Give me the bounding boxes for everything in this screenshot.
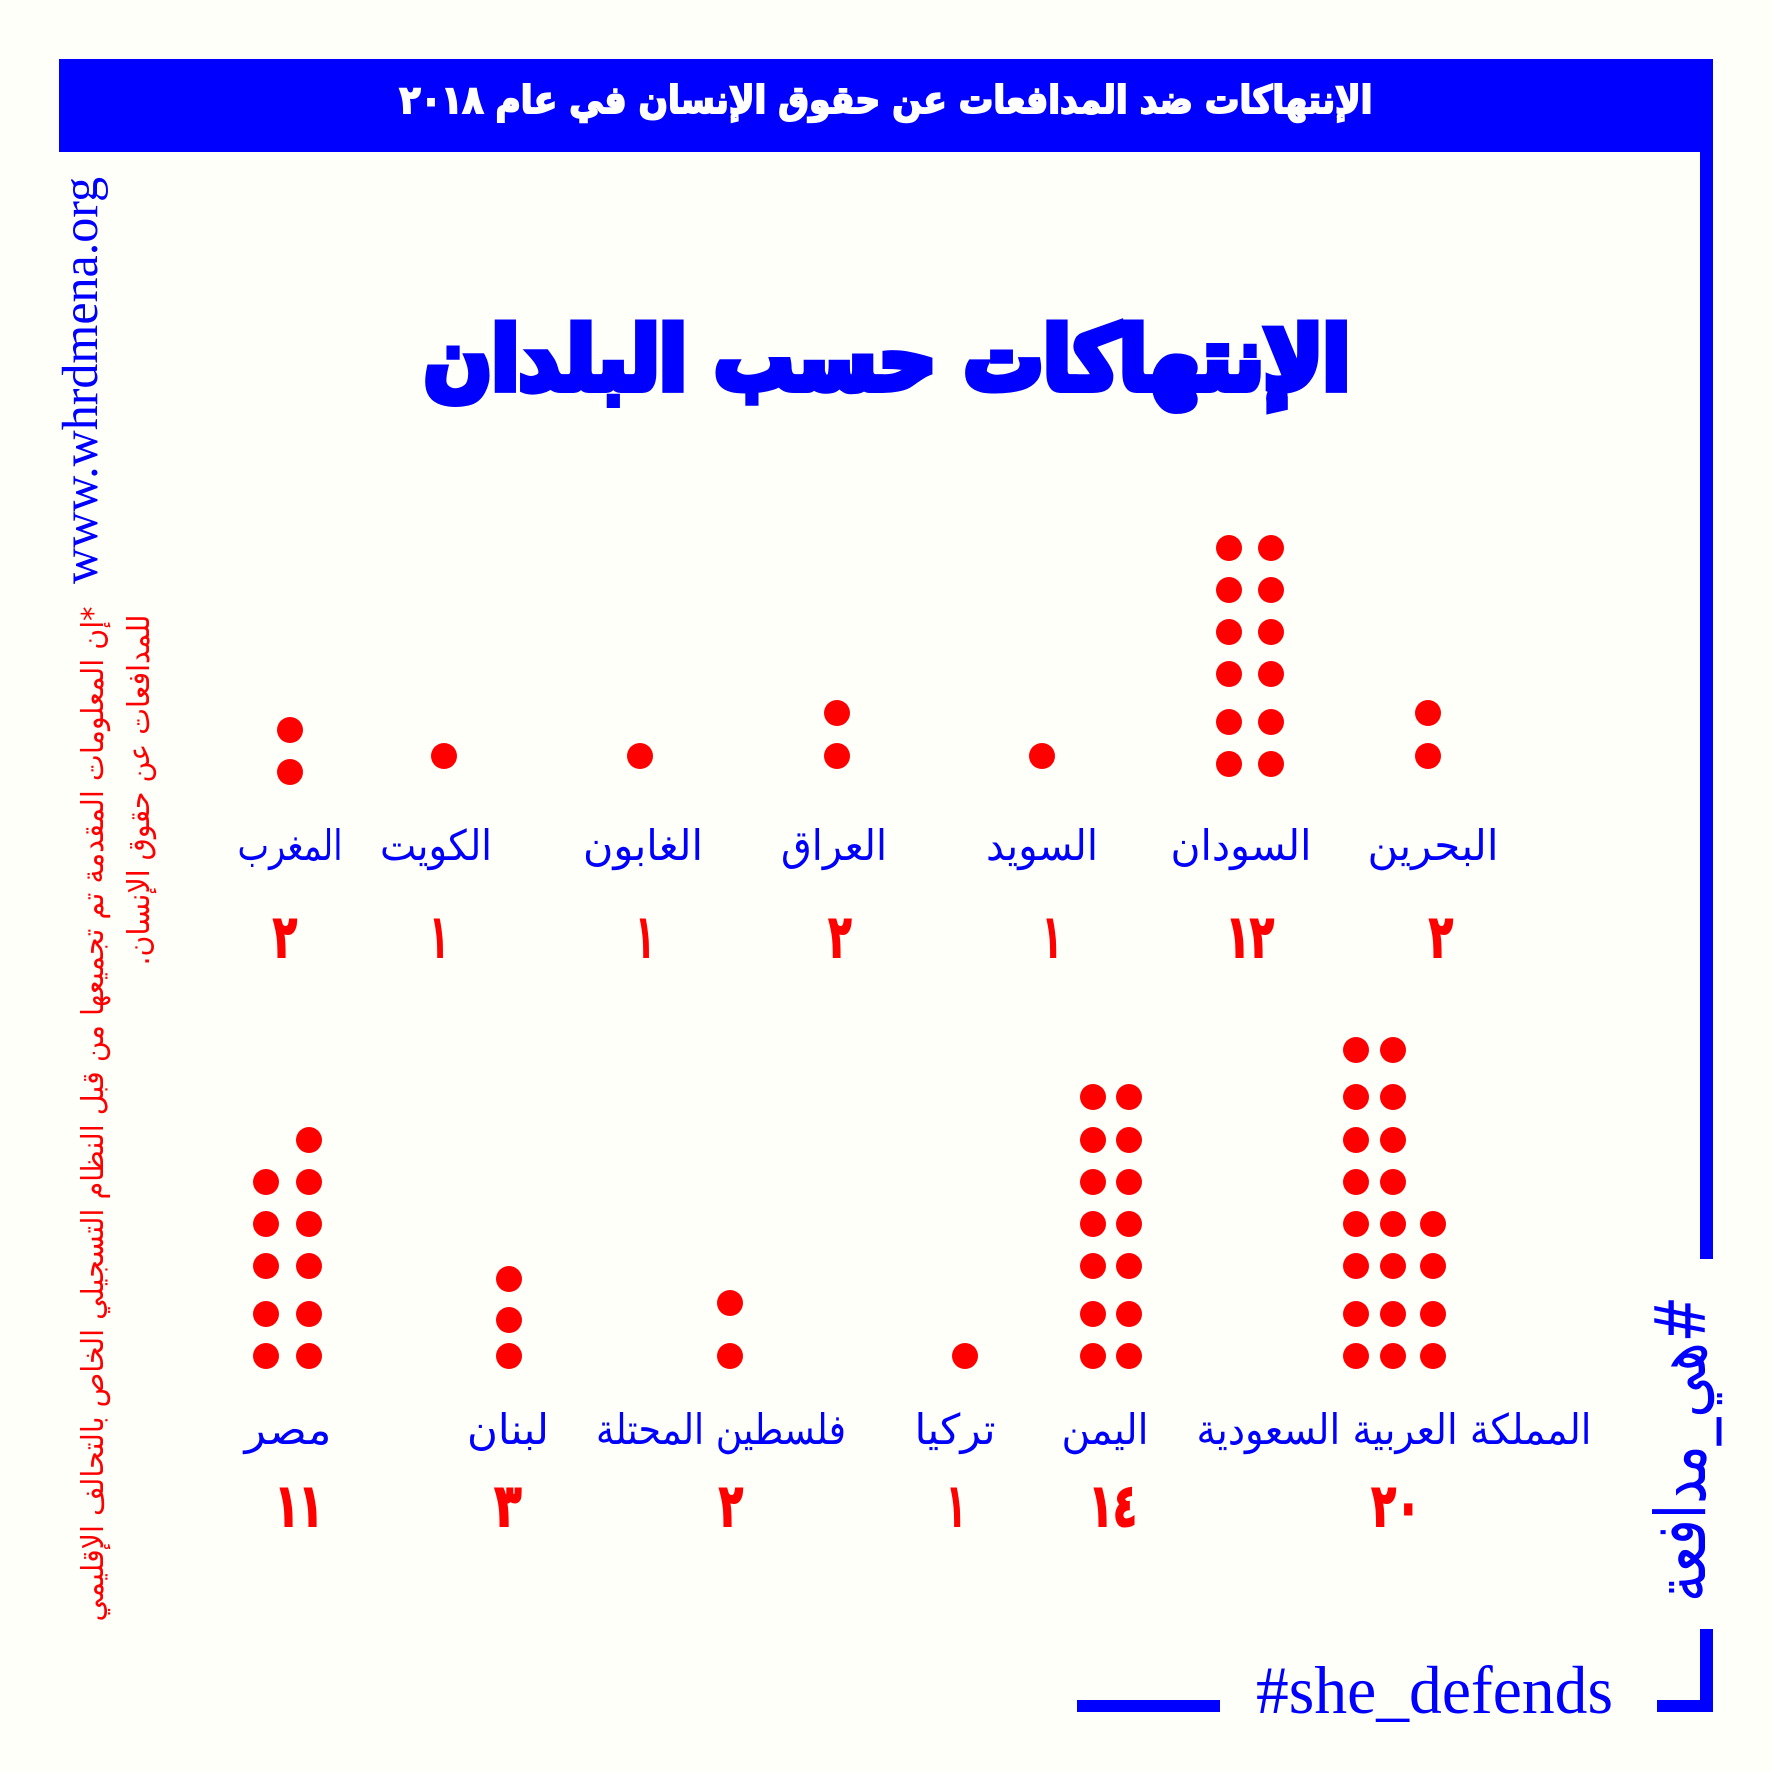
footnote: للمدافعات عن حقوق الإنسان. <box>122 614 157 966</box>
country: Turkey <box>914 1343 996 1540</box>
country: Iraq: ٢ <box>828 902 852 971</box>
country: Saudi Arabia <box>1196 1037 1592 1540</box>
header title: الإنتهاكات ضد المدافعات عن حقوق الإنسان في عام ٢٠١٨ <box>400 78 1372 123</box>
country: Yemen: ١٤ <box>1089 1471 1137 1540</box>
country: Sweden <box>986 743 1098 971</box>
country: Lebanon: ٣ <box>494 1471 522 1540</box>
country: Kuwait <box>380 743 492 971</box>
arabic hashtag: #هي_مدافعة <box>1640 1296 1723 1602</box>
country: Egypt: ١١ <box>275 1471 323 1540</box>
country: Iraq <box>781 700 887 971</box>
country: Sweden: ١ <box>1043 902 1061 971</box>
country: Turkey: ١ <box>947 1471 965 1540</box>
main title: الإنتهاكات حسب البلدان <box>424 310 1350 411</box>
footnote: *إن المعلومات المقدمة تم تجميعها من قبل النظام التسجيلي الخاص بالتحالف الإقليمي <box>76 606 111 1622</box>
country: Gabon: الغابون <box>583 821 703 870</box>
country: Egypt <box>242 1127 332 1540</box>
country: Saudi Arabia: ٢٠ <box>1372 1471 1420 1540</box>
country: Lebanon: لبنان <box>467 1405 549 1454</box>
country: Morocco <box>238 717 342 971</box>
country: Lebanon <box>467 1266 549 1540</box>
country: Occupied Palestine: فلسطين المحتلة <box>596 1405 846 1454</box>
country: Gabon <box>583 743 703 971</box>
website url: www.whrdmena.org <box>53 177 109 584</box>
country: Sudan <box>1170 535 1312 971</box>
country: Turkey: تركيا <box>914 1405 996 1454</box>
country: Sudan: ١٢ <box>1226 902 1274 971</box>
country: Morocco: ٢ <box>273 902 297 971</box>
english hashtag: #she_defends <box>1256 1652 1613 1728</box>
country: Sudan: السودان <box>1170 821 1312 870</box>
country: Saudi Arabia: المملكة العربية السعودية <box>1196 1405 1592 1454</box>
country: Kuwait: ١ <box>430 902 448 971</box>
country: Gabon: ١ <box>636 902 654 971</box>
frame line bottom <box>1077 1700 1220 1712</box>
country: Yemen <box>1062 1084 1148 1540</box>
country: Bahrain: البحرين <box>1368 821 1498 870</box>
header bar <box>59 59 1713 152</box>
country: Yemen: اليمن <box>1062 1405 1148 1454</box>
country: Kuwait: الكويت <box>380 821 492 870</box>
country: Bahrain <box>1368 700 1498 971</box>
country: Morocco: المغرب <box>238 821 342 870</box>
country: Occupied Palestine <box>596 1290 846 1540</box>
country: Occupied Palestine: ٢ <box>719 1471 743 1540</box>
country: Bahrain: ٢ <box>1429 902 1453 971</box>
country: Egypt: مصر <box>242 1405 332 1454</box>
country: Iraq: العراق <box>781 821 887 870</box>
frame corner bottom right <box>1657 1629 1713 1712</box>
footnote <box>76 606 157 1622</box>
country: Sweden: السويد <box>986 821 1098 870</box>
frame line right <box>1700 152 1713 1259</box>
